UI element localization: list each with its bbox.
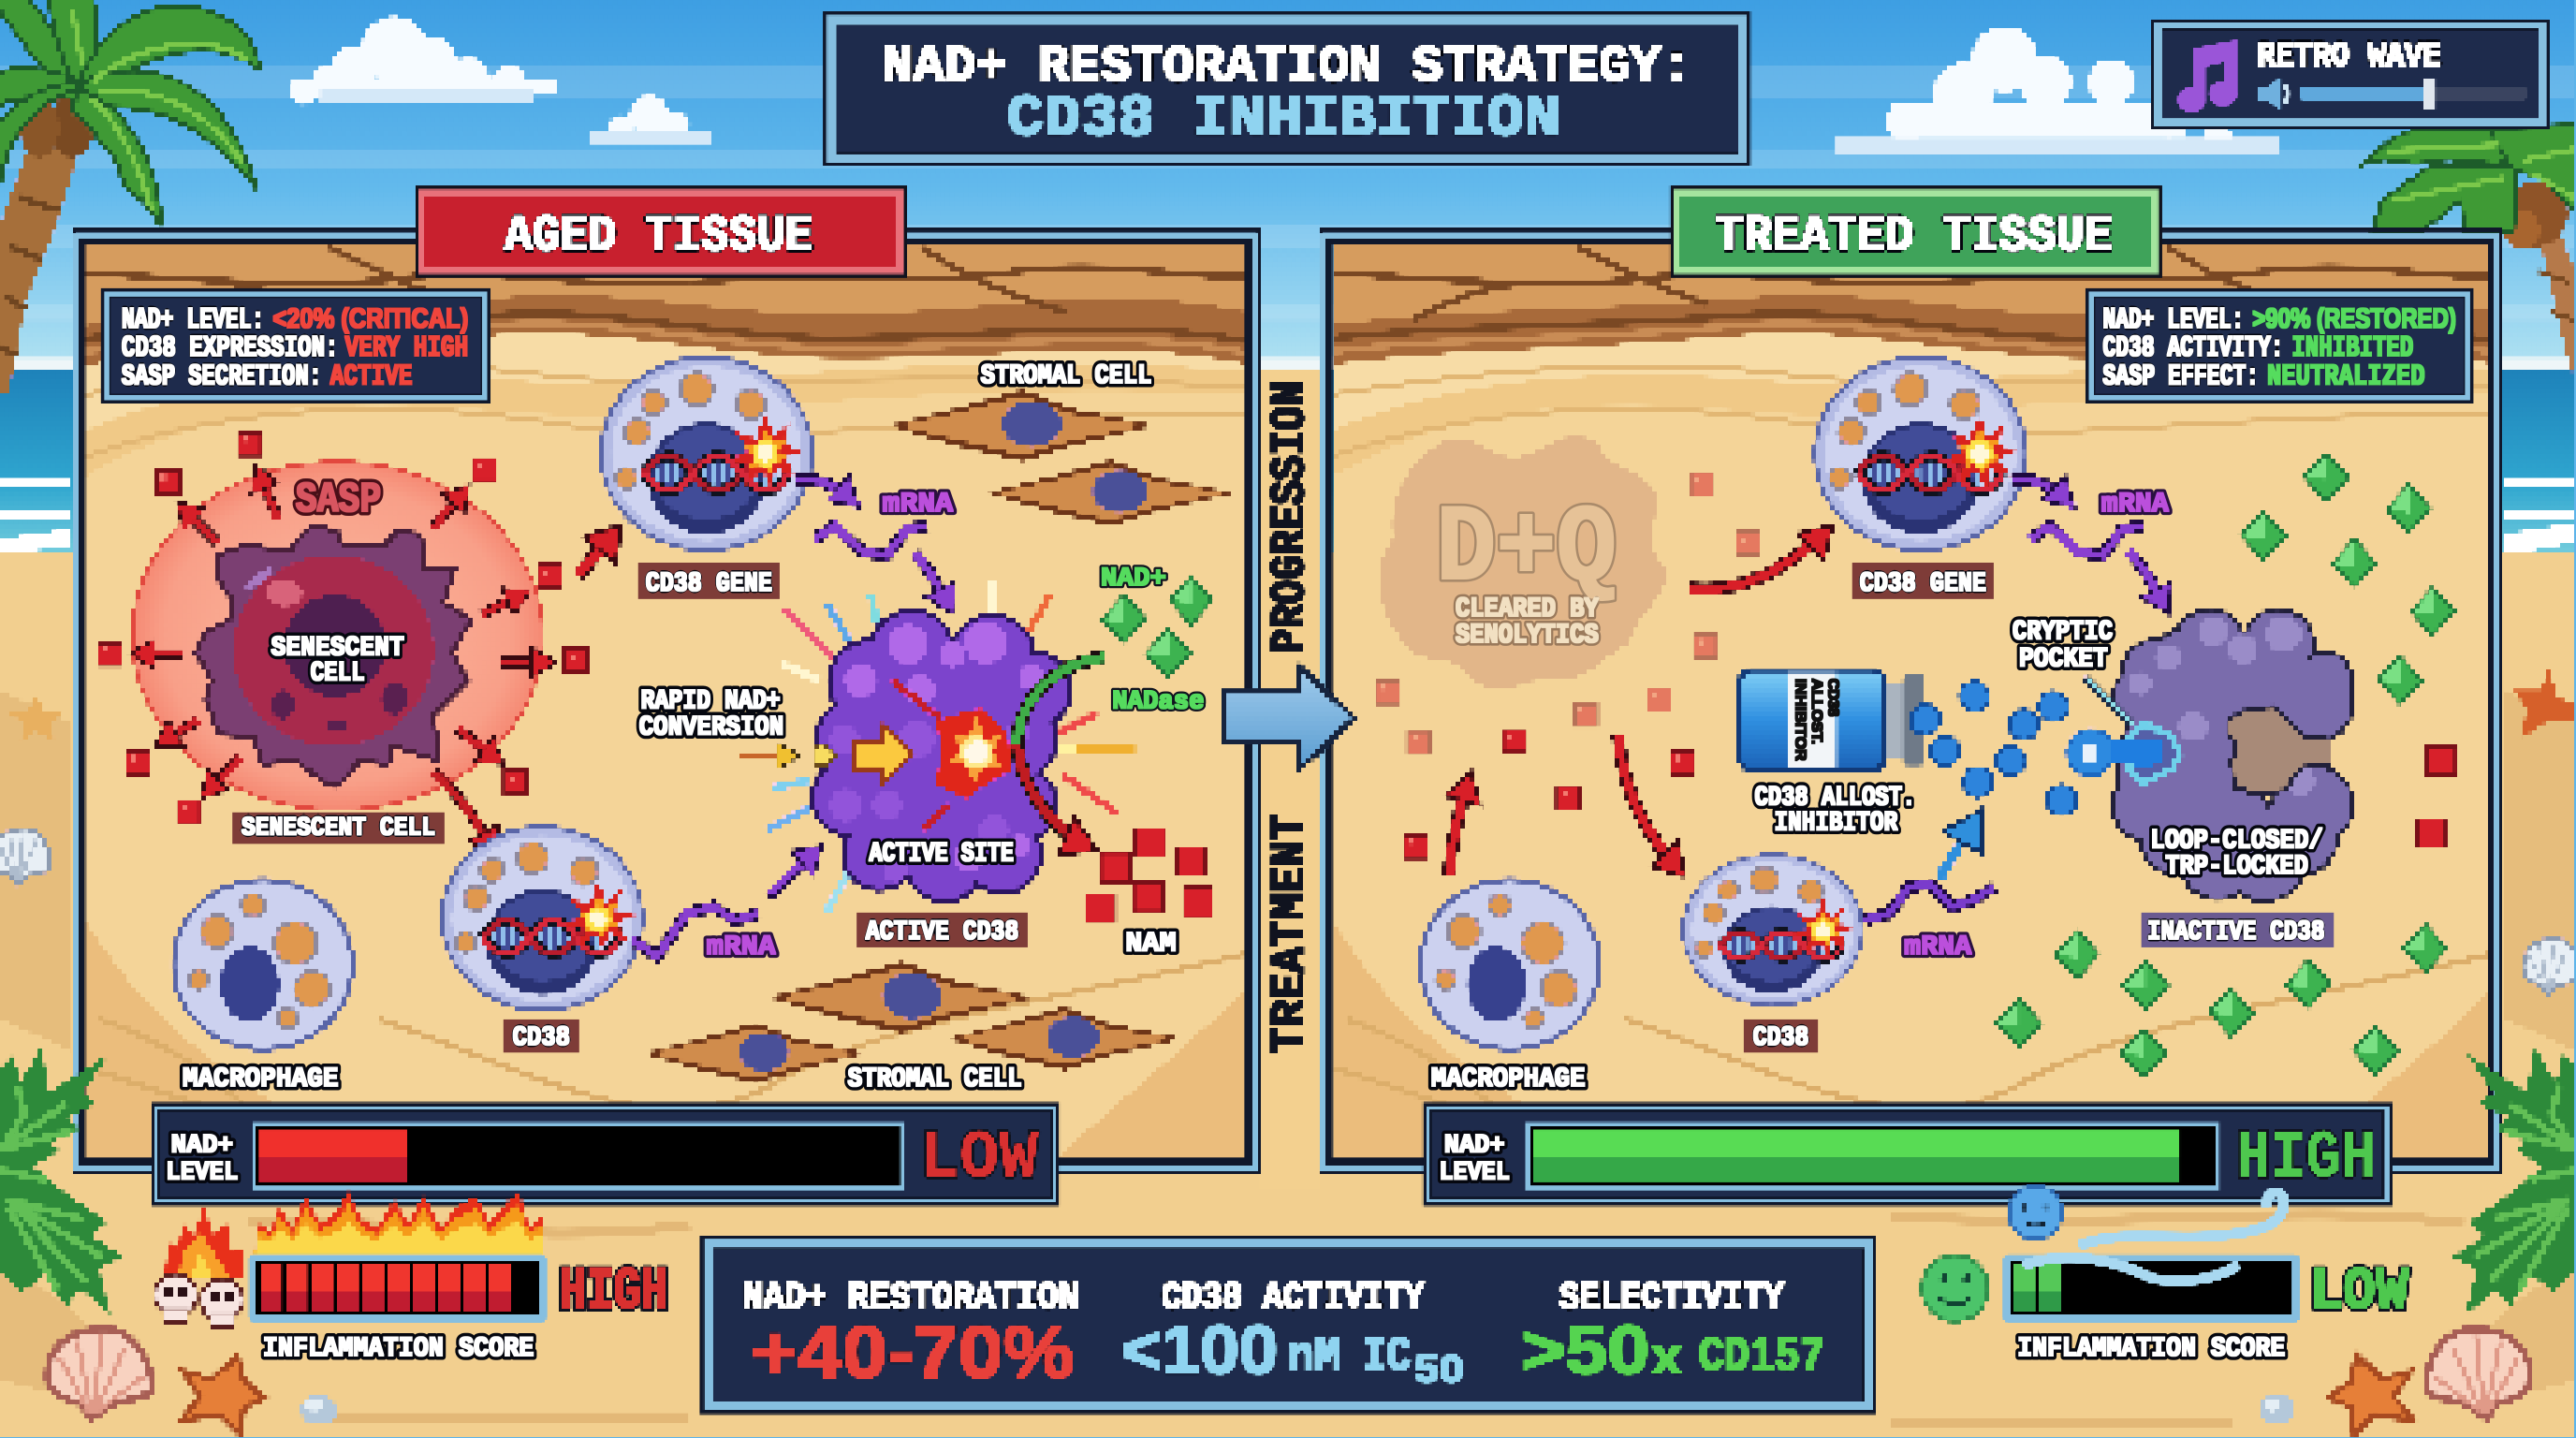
labels: aged tissue: mRNA: [707, 931, 775, 962]
labels: aged tissue: CD38: [513, 1021, 570, 1053]
mRNA arrows top: [2011, 479, 2169, 613]
labels: aged tissue: SENESCENT CELL: [242, 814, 435, 844]
senescent cell with SASP halo: [131, 460, 545, 812]
banner: treated tissue: [1671, 187, 2160, 276]
retro wave label: RETRO WAVE: [2258, 37, 2441, 77]
metric: NAD+ restoration: NAD+ RESTORATION: [742, 1277, 1079, 1320]
labels: aged tissue: mRNA: [882, 488, 953, 520]
remaining SASP particles: [1403, 728, 2457, 859]
stats box: aged: ACTIVE: [330, 361, 413, 394]
labels: aged tissue: MACROPHAGE: [183, 1063, 339, 1094]
metric: CD38 activity: CD38 ACTIVITY: [1162, 1277, 1425, 1320]
NAD+ gems: [1099, 574, 1216, 681]
music player: [2152, 20, 2548, 128]
labels: treated tissue: CD38 GENE: [1860, 567, 1986, 599]
tissue illustration: aged: [85, 243, 1249, 1164]
title box: [825, 13, 1749, 165]
stats box: aged: [102, 289, 490, 403]
labels: treated tissue: INHIBITOR: [1792, 679, 1808, 761]
cloud right: [1837, 26, 2280, 156]
macrophage: [171, 877, 355, 1051]
labels: treated tissue: mRNA: [2101, 488, 2169, 520]
vertical text: progression: PROGRESSION: [1265, 381, 1318, 654]
NAD level bar: treated: LEVEL: [1439, 1158, 1510, 1187]
SASP particles: [97, 431, 590, 825]
SASP arrows: [131, 466, 555, 797]
labels: aged tissue: ACTIVE CD38: [866, 916, 1018, 947]
labels: aged tissue: SASP: [296, 476, 381, 524]
NAD level bar: aged: LOW: [920, 1121, 1039, 1197]
arrow: senescent to CD38 cell: [433, 772, 496, 856]
cloud small: [588, 95, 710, 143]
mRNA squiggle: [1865, 884, 1995, 920]
inflammation gauge: treated: INFLAMMATION SCORE: [2017, 1332, 2285, 1364]
labels: aged tissue: NAM: [1125, 927, 1177, 959]
CD38 gene cell: [599, 355, 814, 552]
metric: CD38 activity: IC: [1362, 1329, 1412, 1386]
icon: speaker: [2259, 79, 2288, 109]
labels: treated tissue: SENOLYTICS: [1456, 619, 1599, 651]
stromal cells bottom: [642, 961, 1183, 1083]
panel frame: aged: [74, 230, 1258, 1173]
labels: aged tissue: ACTIVE SITE: [869, 838, 1014, 870]
inflammation gauge: treated: [2004, 1193, 2408, 1364]
arrow: senescent to gene cell: [578, 526, 621, 575]
active CD38 enzyme: [815, 613, 1068, 899]
decor: side shells and stars: [0, 668, 2576, 997]
labels: treated tissue: CD38: [1753, 1021, 1808, 1053]
stats box: treated: >90% (RESTORED): [2252, 303, 2456, 334]
labels: aged tissue: STROMAL CELL: [981, 360, 1151, 391]
labels: treated tissue: MACROPHAGE: [1431, 1063, 1586, 1094]
progression arrow: [1221, 662, 1358, 774]
metric: NAD+ restoration: +40-70%: [751, 1311, 1075, 1393]
NAD level bar: aged: [151, 1103, 1060, 1206]
labels: treated tissue: TRP-LOCKED: [2165, 850, 2308, 882]
labels: treated tissue: POCKET: [2019, 643, 2108, 675]
CD38 cell: [1681, 853, 1864, 1007]
tissue illustration: treated: [1332, 243, 2496, 1164]
stats box: aged: CD38 EXPRESSION:: [122, 332, 339, 365]
metric: CD38 activity: nM: [1288, 1329, 1340, 1386]
NAD level bar: aged: NAD+: [171, 1131, 233, 1160]
labels: aged tissue: CONVERSION: [639, 712, 783, 743]
foreground decor: ferns, shells, stars, pebbles: [0, 1049, 2576, 1438]
title line 2: CD38 INHIBITION: [1007, 85, 1560, 153]
title line 1: NAD+ RESTORATION STRATEGY:: [882, 39, 1692, 96]
stats box: aged: SASP SECRETION:: [122, 361, 322, 394]
inhibitor vial: [1738, 668, 1925, 772]
labels: aged tissue: NADase: [1112, 687, 1204, 716]
labels: treated tissue: CD38 ALLOST.: [1754, 781, 1915, 813]
labels: treated tissue: INHIBITOR: [1775, 806, 1897, 838]
stromal cells top: [887, 389, 1235, 526]
NAD level bar: treated: NAD+: [1444, 1131, 1505, 1160]
metric: CD38 activity: [1120, 1277, 1464, 1390]
inflammation art: flames and skulls: [153, 1191, 542, 1328]
NAD level bar: aged: LEVEL: [166, 1158, 238, 1187]
macrophage: [1418, 877, 1602, 1051]
cloud left: [291, 17, 555, 105]
metric: selectivity: >50: [1521, 1311, 1649, 1388]
bottom metrics panel: [701, 1238, 1875, 1413]
stats box: aged: <20% (CRITICAL): [272, 303, 468, 334]
labels: treated tissue: LOOP-CLOSED/: [2150, 824, 2323, 856]
blue arrow: [1939, 812, 1980, 879]
sparks around active CD38: [768, 580, 1135, 912]
stats box: treated: SASP EFFECT:: [2103, 361, 2259, 394]
NAD+ gems restored: [1995, 450, 2458, 1079]
metric: NAD+ restoration: [742, 1277, 1079, 1393]
stats box: treated: NAD+ LEVEL:: [2103, 304, 2244, 337]
metric: selectivity: [1521, 1277, 1825, 1388]
metric: CD38 activity: 50: [1414, 1347, 1464, 1390]
mRNA arrows and squiggles top: [797, 479, 953, 613]
inflammation gauge: aged: [250, 1255, 668, 1364]
labels: treated tissue: CD38: [1824, 679, 1840, 716]
stats box: aged: NAD+ LEVEL:: [122, 304, 265, 337]
stats box: treated: CD38 ACTIVITY:: [2103, 332, 2284, 365]
CD38 gene cell: [1813, 355, 2028, 552]
metric: CD38 activity: <100: [1120, 1311, 1278, 1388]
labels: aged tissue: RAPID NAD+: [640, 684, 781, 716]
smiley faces and cool breeze: [1921, 1184, 2063, 1323]
metric: selectivity: CD157: [1699, 1329, 1825, 1386]
inactive CD38 enzyme: [2115, 611, 2351, 899]
volume slider: [2300, 79, 2526, 109]
inflammation gauge: treated: LOW: [2310, 1258, 2408, 1326]
labels: aged tissue: STROMAL CELL: [848, 1063, 1022, 1094]
NADase arc and NAM arrow: [1017, 657, 1104, 849]
palm tree left: [0, 0, 259, 394]
cryptic pocket pointer: [2085, 677, 2132, 725]
labels: treated tissue: [1431, 488, 2333, 1094]
panel: aged tissue: [74, 187, 1258, 1173]
allosteric key: [2066, 723, 2180, 784]
inhibitor molecules: [1910, 682, 2076, 815]
NAD level bar: treated: HIGH: [2236, 1121, 2376, 1197]
red arrows treated: [1449, 526, 1832, 875]
labels: aged tissue: SENESCENT: [271, 631, 404, 663]
breeze over gauge: [2024, 1193, 2284, 1281]
labels: treated tissue: mRNA: [1904, 931, 1971, 962]
banner: aged tissue: AGED TISSUE: [505, 209, 813, 266]
metric: selectivity: x: [1651, 1332, 1682, 1388]
cleared senescent cell cloud: [1379, 436, 1666, 689]
NAD level bar: treated: [1423, 1103, 2392, 1206]
labels: treated tissue: ALLOST.: [1808, 679, 1824, 744]
panel frame: treated: [1321, 230, 2500, 1173]
labels: treated tissue: CRYPTIC: [2012, 616, 2113, 648]
palm tree right: [2364, 125, 2576, 394]
labels: treated tissue: INACTIVE CD38: [2147, 916, 2324, 947]
labels: aged tissue: NAD+: [1101, 565, 1166, 594]
mRNA arrows and squiggles bottom: [633, 846, 822, 956]
banner: treated tissue: TREATED TISSUE: [1715, 209, 2113, 266]
labels: aged tissue: CD38 GENE: [646, 567, 772, 599]
inflammation gauge: aged: HIGH: [559, 1258, 668, 1326]
labels: aged tissue: [183, 360, 1204, 1094]
stats box: treated: NEUTRALIZED: [2267, 361, 2425, 394]
metric: selectivity: SELECTIVITY: [1559, 1277, 1785, 1320]
banner: aged tissue: [416, 187, 905, 276]
panel: treated tissue: [1321, 187, 2500, 1173]
small conversion arrow: [739, 744, 836, 766]
labels: aged tissue: CELL: [311, 657, 365, 689]
vertical text: treatment: TREATMENT: [1265, 814, 1318, 1053]
cleared SASP particles: [1375, 472, 1761, 756]
CD38 cell: [440, 825, 644, 1012]
labels: treated tissue: D+Q: [1436, 489, 1617, 611]
labels: treated tissue: CLEARED BY: [1456, 593, 1599, 624]
stats box: treated: [2086, 289, 2472, 403]
icon: music note: [2178, 41, 2236, 111]
stats box: aged: VERY HIGH: [345, 332, 468, 365]
inflammation gauge: aged: INFLAMMATION SCORE: [263, 1332, 534, 1364]
stats box: treated: INHIBITED: [2291, 332, 2413, 365]
NAM squares: [1085, 828, 1213, 924]
